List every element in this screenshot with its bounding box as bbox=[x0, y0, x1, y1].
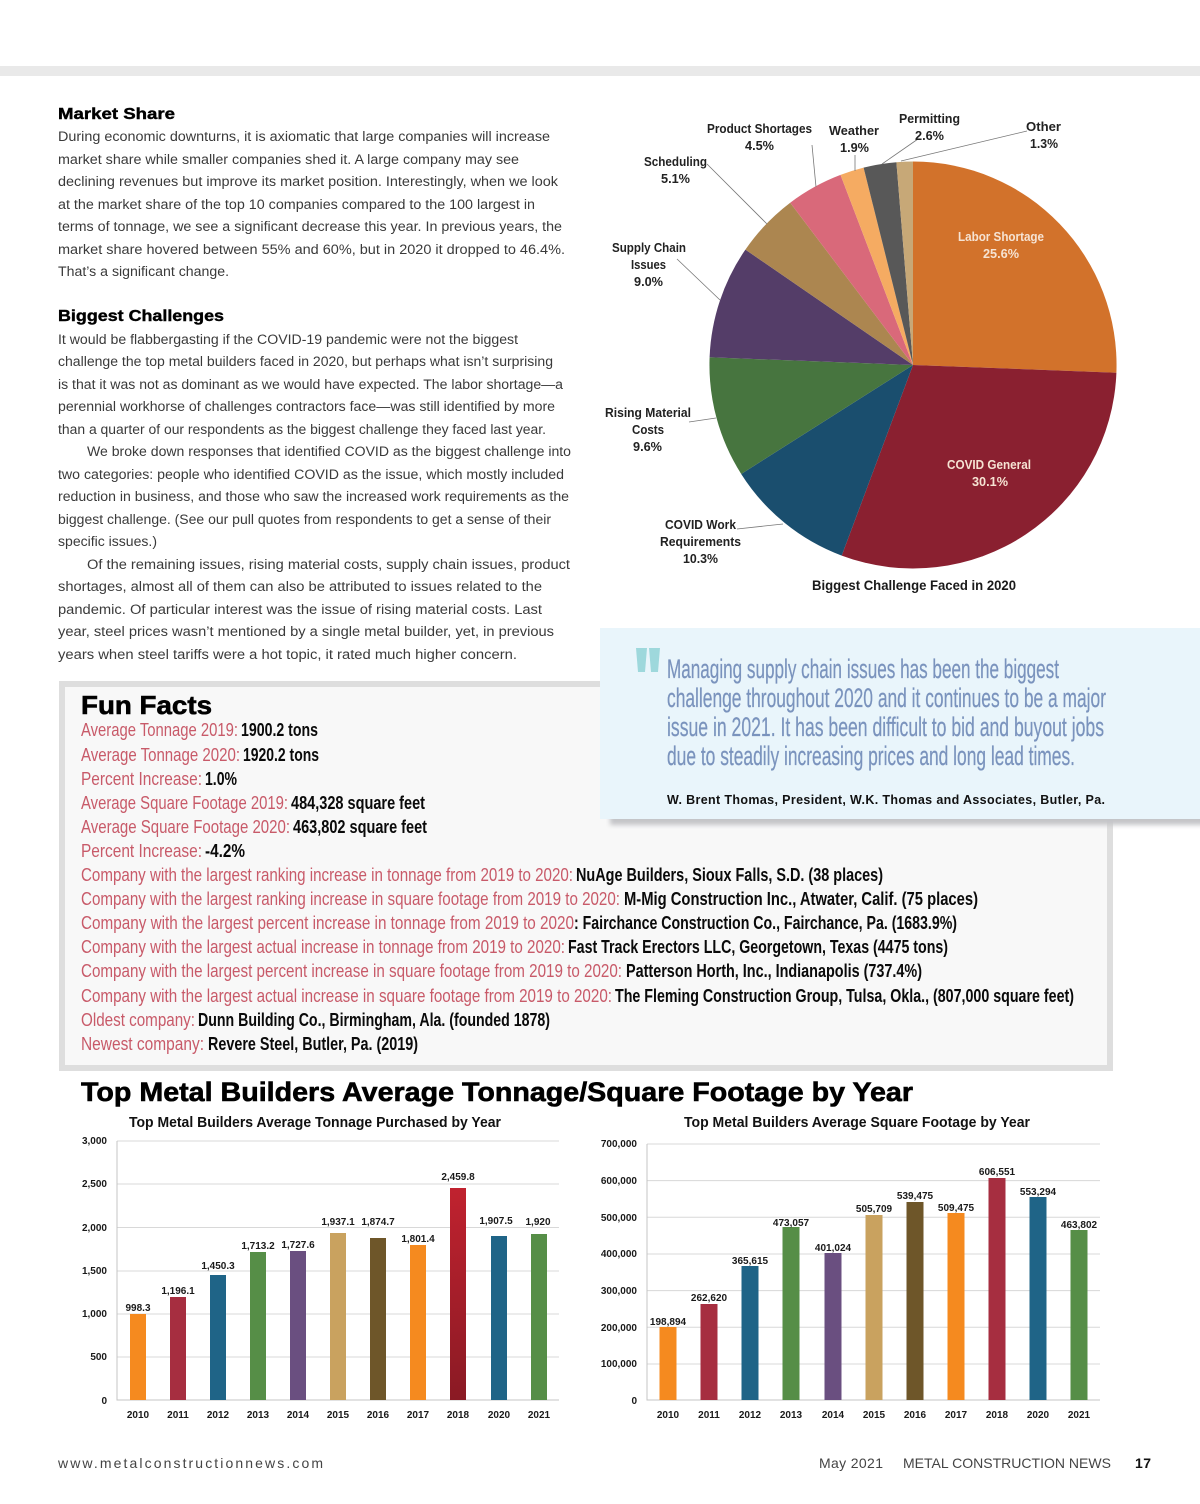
fact: average tonnage 2019: 1900.2 tons bbox=[241, 720, 318, 740]
text block: biggest challenges: biggest challenge. (See our pull quotes from respondents to get a sense of their bbox=[58, 512, 552, 527]
fact: percent increase tonnage company: Company with the largest percent increase in tonnage from 2019 to 2020 bbox=[81, 913, 574, 933]
year labels: 2017 bbox=[945, 1410, 968, 1421]
label: covid general: 30.1% bbox=[972, 475, 1008, 489]
y axis labels: 1,000 bbox=[82, 1309, 107, 1320]
value labels: 463,802 bbox=[1061, 1220, 1098, 1231]
y axis labels: 700,000 bbox=[601, 1139, 637, 1150]
fact: oldest company bbox=[81, 1010, 550, 1030]
label: other bbox=[1026, 120, 1061, 151]
label: labor shortage: 25.6% bbox=[983, 247, 1019, 261]
label: weather: Weather bbox=[829, 124, 879, 138]
text block: biggest challenges: challenge the top metal builders faced in 2020, but perhaps what isn’t surprising bbox=[58, 354, 553, 369]
label: covid general bbox=[947, 458, 1031, 489]
text block: market share: market share while smaller companies shed it. A large company may see bbox=[58, 152, 519, 167]
value labels: 505,709 bbox=[856, 1204, 893, 1215]
y axis labels: 300,000 bbox=[601, 1286, 637, 1297]
label: rising material costs: Rising Material bbox=[605, 406, 691, 420]
y axis labels: 1,500 bbox=[82, 1266, 107, 1277]
text block: market share bbox=[58, 106, 565, 279]
fact: newest company: Revere Steel, Butler, Pa. (2019) bbox=[208, 1034, 418, 1054]
text block: market share: market share hovered between 55% and 60%, but in 2020 it dropped to 46.4%. bbox=[58, 242, 565, 257]
fact: ranking increase square footage: M-Mig Construction Inc., Atwater, Calif. (75 places) bbox=[624, 889, 978, 909]
text block: market share: at the market share of the top 10 companies compared to the 100 largest in bbox=[58, 197, 535, 212]
text block: biggest challenges: two categories: people who identified COVID as the issue, which mostly included bbox=[58, 467, 564, 482]
fact: average tonnage 2019: Average Tonnage 2019: bbox=[81, 720, 238, 740]
y axis labels: 0 bbox=[631, 1396, 637, 1407]
value labels: 365,615 bbox=[732, 1256, 769, 1267]
year labels: 2020 bbox=[1027, 1410, 1050, 1421]
fact: actual increase tonnage company: Fast Track Erectors LLC, Georgetown, Texas (4475 tons) bbox=[568, 937, 948, 957]
year labels: 2021 bbox=[528, 1410, 551, 1421]
y axis labels: 2,000 bbox=[82, 1223, 107, 1234]
value labels: 1,920 bbox=[525, 1217, 551, 1228]
value labels: 1,907.5 bbox=[479, 1216, 513, 1227]
text block: biggest challenges: Of the remaining issues, rising material costs, supply chain issues, product bbox=[87, 557, 570, 572]
text block: biggest challenges bbox=[58, 308, 571, 662]
fact: actual increase tonnage company bbox=[81, 937, 948, 957]
value labels: 1,801.4 bbox=[401, 1234, 435, 1245]
slice: supply chain issues bbox=[710, 250, 913, 365]
value labels: 539,475 bbox=[897, 1191, 934, 1202]
heading: fun facts: Fun Facts bbox=[81, 690, 212, 720]
fact: percent increase tonnage company: : Fairchance Construction Co., Fairchance, Pa. (1683.9%) bbox=[574, 913, 957, 933]
pie slices bbox=[709, 161, 1117, 569]
fact: oldest company: Oldest company: bbox=[81, 1010, 195, 1030]
label: labor shortage bbox=[958, 230, 1044, 261]
value labels: 1,713.2 bbox=[241, 1241, 275, 1252]
year labels: 2010 bbox=[127, 1410, 150, 1421]
label: covid general: COVID General bbox=[947, 458, 1031, 472]
label: supply chain issues bbox=[612, 241, 686, 289]
year labels: 2018 bbox=[986, 1410, 1009, 1421]
chart title: Top Metal Builders Average Square Footage by Year bbox=[684, 1115, 1030, 1131]
text block: biggest challenges: shortages, almost all of them can also be attributed to issues related to the bbox=[58, 579, 542, 594]
fact: actual increase tonnage company: Company with the largest actual increase in tonnage from 2019 to 2020: bbox=[81, 937, 565, 957]
slice: scheduling bbox=[745, 203, 913, 365]
year labels: 2013 bbox=[247, 1410, 270, 1421]
text block: biggest challenges: It would be flabbergasting if the COVID-19 pandemic were not the biggest bbox=[58, 332, 518, 347]
y axis labels: 600,000 bbox=[601, 1176, 637, 1187]
text block: biggest challenges: pandemic. Of particular interest was the issue of rising material costs. Last bbox=[58, 602, 542, 617]
heading: charts section: Top Metal Builders Average Tonnage/Square Footage by Year bbox=[81, 1077, 914, 1107]
year labels: 2016 bbox=[367, 1410, 390, 1421]
y axis labels: 2,500 bbox=[82, 1179, 107, 1190]
label: supply chain issues: 9.0% bbox=[634, 275, 663, 289]
y axis labels bbox=[82, 1136, 107, 1407]
fact: oldest company: Dunn Building Co., Birmingham, Ala. (founded 1878) bbox=[198, 1010, 550, 1030]
quote text bbox=[667, 654, 1106, 771]
label: scheduling: 5.1% bbox=[661, 172, 690, 186]
y axis labels: 500 bbox=[90, 1352, 107, 1363]
value labels: 401,024 bbox=[815, 1243, 852, 1254]
text block: biggest challenges: specific issues.) bbox=[58, 534, 157, 549]
text block: biggest challenges: year, steel prices wasn’t mentioned by a single metal builder, yet, in previous bbox=[58, 624, 554, 639]
heading: biggest challenges: Biggest Challenges bbox=[58, 308, 224, 325]
fact: percent increase tonnage company bbox=[81, 913, 957, 933]
label: permitting: 2.6% bbox=[915, 129, 944, 143]
year labels: 2015 bbox=[327, 1410, 350, 1421]
fact: actual increase square footage company: The Fleming Construction Group, Tulsa, Okla., (807,000 square feet) bbox=[615, 986, 1074, 1006]
fact: percent increase tonnage: Percent Increase: bbox=[81, 769, 202, 789]
value labels: 998.3 bbox=[125, 1303, 151, 1314]
fact: actual increase square footage company: Company with the largest actual increase in square footage from 2019 to 2020: bbox=[81, 986, 612, 1006]
panel: fun facts bbox=[62, 684, 1110, 1068]
footer: 17 bbox=[1135, 1455, 1151, 1471]
label: scheduling: Scheduling bbox=[644, 155, 707, 169]
fact: actual increase square footage company bbox=[81, 986, 1074, 1006]
label: covid work requirements bbox=[660, 518, 741, 566]
quote attribution: W. Brent Thomas, President, W.K. Thomas and Associates, Butler, Pa. bbox=[667, 793, 1105, 807]
label: permitting: Permitting bbox=[899, 112, 960, 126]
year labels: 2018 bbox=[447, 1410, 470, 1421]
value labels: 553,294 bbox=[1020, 1187, 1057, 1198]
slice: weather bbox=[840, 168, 913, 365]
slice: rising material costs bbox=[709, 357, 913, 474]
y axis labels bbox=[601, 1139, 637, 1407]
fact: average square footage 2019: Average Square Footage 2019: bbox=[81, 793, 288, 813]
slice: covid general bbox=[842, 365, 1116, 569]
value labels: 1,450.3 bbox=[201, 1261, 235, 1272]
year labels bbox=[657, 1410, 1091, 1421]
text block: biggest challenges: years when steel tariffs were a hot topic, it rated much higher concern. bbox=[58, 647, 517, 662]
text block: market share: declining revenues but improve its market position. Interestingly, when we look bbox=[58, 174, 558, 189]
label: supply chain issues: Supply Chain bbox=[612, 241, 686, 255]
slice: covid work requirements bbox=[741, 365, 913, 556]
label: rising material costs: 9.6% bbox=[633, 440, 662, 454]
year labels: 2011 bbox=[698, 1410, 720, 1421]
fact: average tonnage 2020: Average Tonnage 2020: bbox=[81, 745, 240, 765]
value labels: 1,874.7 bbox=[361, 1217, 395, 1228]
year labels bbox=[127, 1410, 551, 1421]
value labels: 509,475 bbox=[938, 1203, 975, 1214]
footer: www.metalconstructionnews.com bbox=[57, 1455, 323, 1471]
y axis labels: 200,000 bbox=[601, 1323, 637, 1334]
label: labor shortage: Labor Shortage bbox=[958, 230, 1044, 244]
bars bbox=[130, 1188, 547, 1400]
footer: May 2021 bbox=[819, 1455, 883, 1471]
text block: biggest challenges: than a quarter of our respondents as the biggest challenge they faced last year. bbox=[58, 422, 546, 437]
footer: METAL CONSTRUCTION NEWS bbox=[903, 1455, 1111, 1471]
fact: average square footage 2020: 463,802 square feet bbox=[293, 817, 427, 837]
y axis labels: 0 bbox=[101, 1396, 107, 1407]
value labels: 1,196.1 bbox=[161, 1286, 195, 1297]
value labels: 1,727.6 bbox=[281, 1240, 315, 1251]
fact: percent increase tonnage: 1.0% bbox=[205, 769, 237, 789]
fact: ranking increase square footage: Company with the largest ranking increase in square footage from 2019 to 2020: bbox=[81, 889, 620, 909]
text block: market share: That’s a significant change. bbox=[58, 264, 229, 279]
year labels: 2011 bbox=[167, 1410, 189, 1421]
slice: permitting bbox=[864, 162, 913, 365]
slice: other bbox=[896, 162, 913, 365]
fact: percent increase square footage company: Company with the largest percent increase in square footage from 2019 to 2020: bbox=[81, 961, 622, 981]
text block: biggest challenges: We broke down responses that identified COVID as the biggest challenge into bbox=[87, 444, 571, 459]
text block: biggest challenges: reduction in business, and those who saw the increased work requirements as the bbox=[58, 489, 569, 504]
y axis labels: 3,000 bbox=[82, 1136, 107, 1147]
year labels: 2021 bbox=[1068, 1410, 1091, 1421]
value labels: 606,551 bbox=[979, 1167, 1016, 1178]
year labels: 2016 bbox=[904, 1410, 927, 1421]
slice: product shortages bbox=[790, 175, 913, 365]
fact: percent increase square footage: -4.2% bbox=[205, 841, 245, 861]
text block: biggest challenges: is that it was not as dominant as we would have expected. The labor shortage—a bbox=[58, 377, 564, 392]
label: rising material costs: Costs bbox=[632, 423, 664, 437]
label: other: 1.3% bbox=[1030, 137, 1058, 151]
year labels: 2015 bbox=[863, 1410, 886, 1421]
label: rising material costs bbox=[605, 406, 691, 454]
value labels: 1,937.1 bbox=[321, 1217, 355, 1228]
fact: average square footage 2020: Average Square Footage 2020: bbox=[81, 817, 290, 837]
y axis labels: 100,000 bbox=[601, 1359, 637, 1370]
fact: ranking increase tonnage: Company with the largest ranking increase in tonnage from 2019 to 2020: bbox=[81, 865, 573, 885]
bars bbox=[660, 1178, 1088, 1400]
value labels: 2,459.8 bbox=[441, 1172, 475, 1183]
fact: average square footage 2019: 484,328 square feet bbox=[291, 793, 425, 813]
label: product shortages bbox=[707, 122, 812, 153]
year labels: 2020 bbox=[488, 1410, 511, 1421]
fact: newest company: Newest company: bbox=[81, 1034, 204, 1054]
label: product shortages: Product Shortages bbox=[707, 122, 812, 136]
label: weather bbox=[829, 124, 879, 155]
slice: labor shortage bbox=[913, 161, 1117, 373]
fact: percent increase square footage: Percent Increase: bbox=[81, 841, 202, 861]
value labels bbox=[650, 1167, 1098, 1328]
value labels: 198,894 bbox=[650, 1317, 687, 1328]
label: covid work requirements: COVID Work bbox=[665, 518, 736, 532]
pie chart caption: Biggest Challenge Faced in 2020 bbox=[812, 577, 1016, 593]
year labels: 2017 bbox=[407, 1410, 430, 1421]
fact: ranking increase tonnage: NuAge Builders, Sioux Falls, S.D. (38 places) bbox=[576, 865, 883, 885]
fact: percent increase square footage company: Patterson Horth, Inc., Indianapolis (737.4%) bbox=[626, 961, 922, 981]
text block: biggest challenges: perennial workhorse of challenges contractors face—was still identified by more bbox=[58, 399, 555, 414]
fact: average tonnage 2020: 1920.2 tons bbox=[243, 745, 319, 765]
callout: pull quote bbox=[600, 628, 1200, 819]
y axis labels: 400,000 bbox=[601, 1249, 637, 1260]
label: permitting bbox=[899, 112, 960, 143]
year labels: 2012 bbox=[207, 1410, 230, 1421]
bar chart: average square footage bbox=[601, 1115, 1100, 1421]
label: other: Other bbox=[1026, 120, 1061, 134]
heading: market share: Market Share bbox=[58, 106, 175, 123]
value labels: 262,620 bbox=[691, 1293, 728, 1304]
year labels: 2010 bbox=[657, 1410, 680, 1421]
footer bbox=[57, 1455, 1151, 1471]
year labels: 2014 bbox=[287, 1410, 310, 1421]
chart title: Top Metal Builders Average Tonnage Purchased by Year bbox=[129, 1115, 501, 1131]
fact: newest company bbox=[81, 1034, 418, 1054]
label: weather: 1.9% bbox=[840, 141, 869, 155]
bar chart: average tonnage bbox=[82, 1115, 559, 1421]
icon: quotation mark bbox=[636, 648, 660, 672]
value labels: 473,057 bbox=[773, 1218, 810, 1229]
label: covid work requirements: 10.3% bbox=[683, 552, 718, 566]
text block: market share: terms of tonnage, we see a significant decrease this year. In previous years, the bbox=[58, 219, 562, 234]
value labels bbox=[125, 1172, 551, 1314]
label: covid work requirements: Requirements bbox=[660, 535, 741, 549]
year labels: 2012 bbox=[739, 1410, 762, 1421]
year labels: 2013 bbox=[780, 1410, 803, 1421]
label: product shortages: 4.5% bbox=[745, 139, 774, 153]
year labels: 2014 bbox=[822, 1410, 845, 1421]
text block: market share: During economic downturns, it is axiomatic that large companies will increase bbox=[58, 129, 550, 144]
pie chart: biggest challenge faced in 2020 bbox=[605, 112, 1117, 593]
label: scheduling bbox=[644, 155, 707, 186]
y axis labels: 500,000 bbox=[601, 1213, 637, 1224]
label: supply chain issues: Issues bbox=[631, 258, 666, 272]
